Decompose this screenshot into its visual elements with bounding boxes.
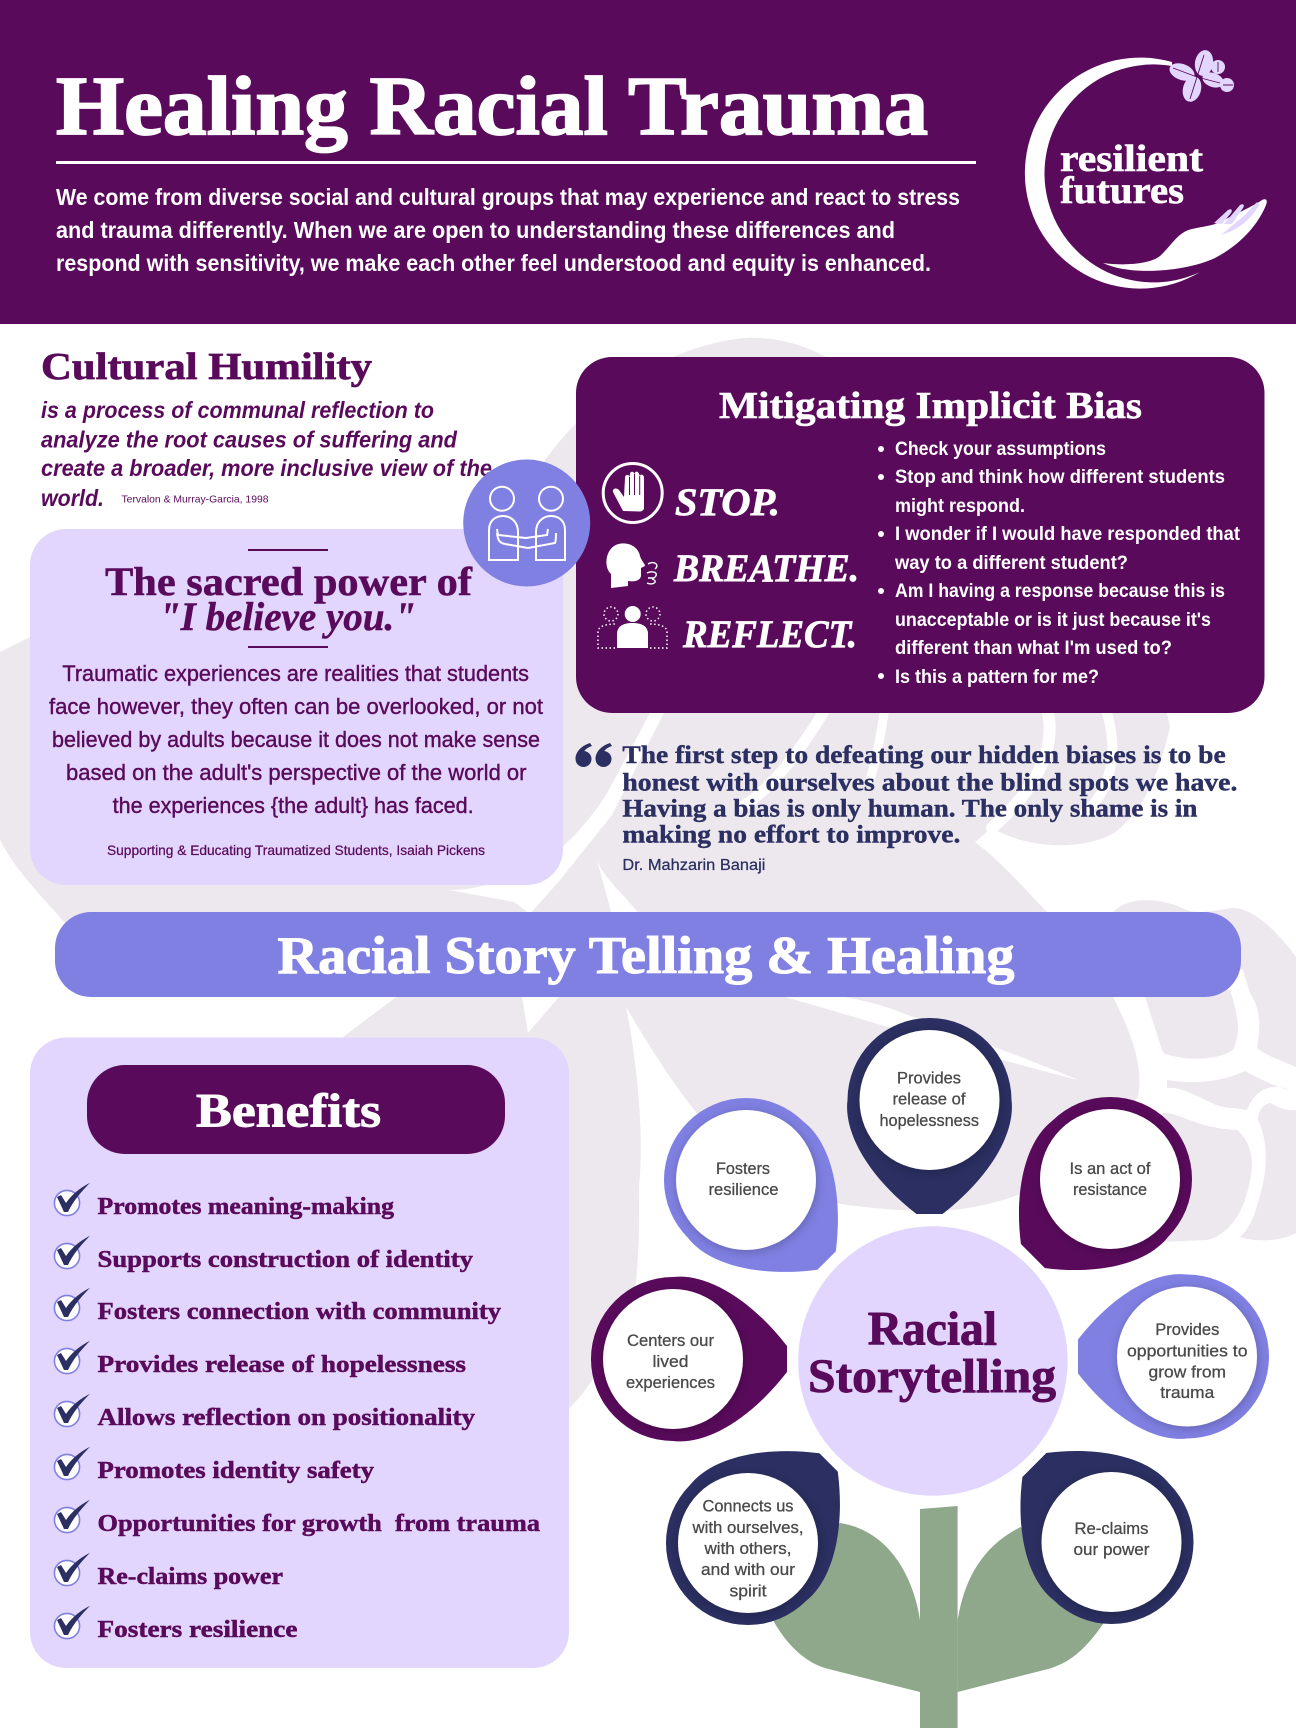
background flower watermark bbox=[0, 338, 1296, 1480]
flower stem and leaves bbox=[760, 1506, 1110, 1728]
sacred power body text: the experiences {the adult} has faced. bbox=[113, 793, 474, 818]
heading: mitigating implicit bias: Mitigating Implicit Bias bbox=[719, 385, 1142, 427]
petal: is an act of resistance: Is an act of bbox=[1070, 1159, 1151, 1178]
petal: provides release of hopelessness: Provides bbox=[897, 1068, 961, 1088]
header intro text: We come from diverse social and cultural groups that may experience and react to stress bbox=[56, 184, 960, 210]
bias checklist: Check your assumptions bbox=[895, 438, 1106, 460]
petal: provides opportunities: trauma bbox=[1160, 1383, 1215, 1402]
benefits checklist: Fosters resilience bbox=[98, 1617, 298, 1643]
heading: the sacred power: The sacred power of bbox=[105, 559, 473, 604]
title: Healing Racial Trauma bbox=[56, 60, 928, 153]
benefits heading bbox=[87, 1065, 505, 1154]
cultural humility definition bbox=[41, 397, 492, 511]
label: REFLECT: REFLECT. bbox=[682, 613, 857, 656]
icon: reflecting people bbox=[598, 606, 667, 648]
petal: fosters resilience bbox=[630, 1064, 885, 1319]
petal: provides release of hopelessness: release of bbox=[892, 1090, 966, 1108]
petal: centers our lived experiences: lived bbox=[652, 1352, 688, 1371]
petal: provides opportunities bbox=[1078, 1274, 1269, 1439]
label: BREATHE: BREATHE. bbox=[673, 547, 859, 590]
quote mark bbox=[576, 743, 612, 767]
heading: Cultural Humility: Cultural Humility bbox=[41, 346, 372, 388]
header intro text bbox=[56, 184, 960, 276]
center circle: racial storytelling bbox=[798, 1226, 1068, 1496]
logo: resilient futures bbox=[1025, 49, 1267, 289]
petal: connects us bbox=[632, 1404, 887, 1659]
cultural humility definition: is a process of communal reflection to bbox=[41, 397, 434, 423]
title divider bbox=[56, 161, 976, 164]
petal: connects us: and with our bbox=[701, 1560, 795, 1579]
benefits checklist: Promotes identity safety bbox=[98, 1458, 374, 1484]
benefits checklist: Provides release of hopelessness bbox=[98, 1352, 466, 1378]
quote attribution: Dr. Mahzarin Banaji bbox=[622, 857, 765, 874]
bias checklist: way to a different student? bbox=[894, 552, 1128, 574]
icon: stop hand bbox=[603, 464, 662, 522]
bias checklist: unacceptable or is it just because it's bbox=[895, 609, 1211, 631]
quote text bbox=[622, 742, 1237, 848]
petal: connects us: with ourselves, bbox=[692, 1518, 804, 1537]
petal: provides release of hopelessness: hopelessness bbox=[880, 1111, 979, 1130]
citation: Pickens: Supporting & Educating Traumatized Students, Isaiah Pickens bbox=[107, 842, 485, 858]
quote text: honest with ourselves about the blind spots we have. bbox=[622, 770, 1237, 796]
petal: re-claims our power: Re-claims bbox=[1074, 1519, 1148, 1538]
petal: centers our lived experiences: experiences bbox=[626, 1373, 715, 1392]
petal: is an act of resistance: resistance bbox=[1073, 1180, 1147, 1199]
benefits checklist: Re-claims power bbox=[98, 1564, 283, 1590]
sacred power body text: based on the adult's perspective of the world or bbox=[66, 760, 526, 785]
sacred power body text: Traumatic experiences are realities that students bbox=[62, 661, 529, 686]
panel: mitigating implicit bias bbox=[576, 357, 1264, 713]
header band bbox=[0, 0, 1296, 324]
petal: connects us: Connects us bbox=[702, 1496, 794, 1516]
logo: resilient futures: futures bbox=[1060, 170, 1184, 212]
petal: is an act of resistance bbox=[975, 1063, 1226, 1314]
petal: fosters resilience: Fosters bbox=[716, 1159, 770, 1178]
icon: supportive handshake bbox=[463, 460, 590, 586]
benefits checklist: Supports construction of identity bbox=[98, 1247, 473, 1273]
center circle: racial storytelling: Racial bbox=[868, 1302, 997, 1356]
quote text: making no effort to improve. bbox=[622, 822, 960, 848]
petal: re-claims our power: our power bbox=[1074, 1540, 1150, 1559]
petal: connects us: spirit bbox=[730, 1582, 767, 1600]
petal: connects us: with others, bbox=[703, 1539, 792, 1558]
logo: resilient futures: resilient bbox=[1060, 138, 1203, 180]
citation: Tervalon: Tervalon & Murray-Garcia, 1998 bbox=[122, 494, 269, 506]
bias checklist: Am I having a response because this is bbox=[895, 580, 1225, 602]
header intro text: and trauma differently. When we are open to understanding these differences and bbox=[56, 217, 895, 243]
benefits checklist: Promotes meaning-making bbox=[98, 1194, 394, 1220]
bias checklist: Is this a pattern for me? bbox=[895, 666, 1099, 688]
benefits heading: Benefits bbox=[196, 1084, 381, 1138]
section banner bbox=[55, 912, 1241, 997]
sacred power body text: believed by adults because it does not make sense bbox=[52, 727, 540, 752]
cultural humility definition: world. bbox=[41, 485, 104, 511]
heading: I believe you: "I believe you." bbox=[159, 594, 416, 639]
bias checklist: I wonder if I would have responded that bbox=[895, 523, 1240, 545]
panel: sacred power bbox=[30, 529, 563, 885]
bias checklist: different than what I'm used to? bbox=[895, 637, 1172, 659]
benefits checklist: Allows reflection on positionality bbox=[98, 1405, 475, 1431]
petal: fosters resilience: resilience bbox=[708, 1180, 778, 1199]
banner heading: Racial Story Telling & Healing bbox=[278, 927, 1014, 985]
quote text: The first step to defeating our hidden biases is to be bbox=[622, 742, 1226, 769]
petal: re-claims our power bbox=[976, 1407, 1228, 1658]
center circle: racial storytelling: Storytelling bbox=[808, 1350, 1056, 1403]
cultural humility definition: analyze the root causes of suffering and bbox=[41, 426, 458, 452]
petal: provides opportunities: opportunities to bbox=[1127, 1342, 1248, 1360]
label: STOP: STOP. bbox=[675, 481, 780, 524]
panel: benefits bbox=[30, 1038, 569, 1668]
benefits checklist: Fosters connection with community bbox=[98, 1299, 501, 1325]
petal: provides opportunities: Provides bbox=[1155, 1320, 1219, 1339]
bias checklist: might respond. bbox=[895, 495, 1025, 517]
petal: centers our lived experiences: Centers our bbox=[627, 1331, 714, 1350]
quote text: Having a bias is only human. The only shame is in bbox=[622, 796, 1197, 822]
petal: provides release of hopelessness bbox=[847, 1018, 1012, 1214]
cultural humility definition: create a broader, more inclusive view of the bbox=[41, 455, 492, 481]
petal: centers our lived experiences bbox=[591, 1277, 787, 1441]
icon: breathing head bbox=[606, 543, 657, 588]
sacred power body text: face however, they often can be overlooked, or not bbox=[49, 694, 543, 719]
bias checklist bbox=[878, 438, 1240, 688]
benefits checklist: Opportunities for growth from trauma bbox=[98, 1511, 540, 1537]
petal: provides opportunities: grow from bbox=[1148, 1362, 1226, 1382]
header intro text: respond with sensitivity, we make each other feel understood and equity is enhanced. bbox=[56, 250, 931, 276]
bias checklist: Stop and think how different students bbox=[895, 466, 1225, 488]
sacred power body text bbox=[49, 661, 543, 818]
benefits checklist bbox=[54, 1183, 540, 1643]
